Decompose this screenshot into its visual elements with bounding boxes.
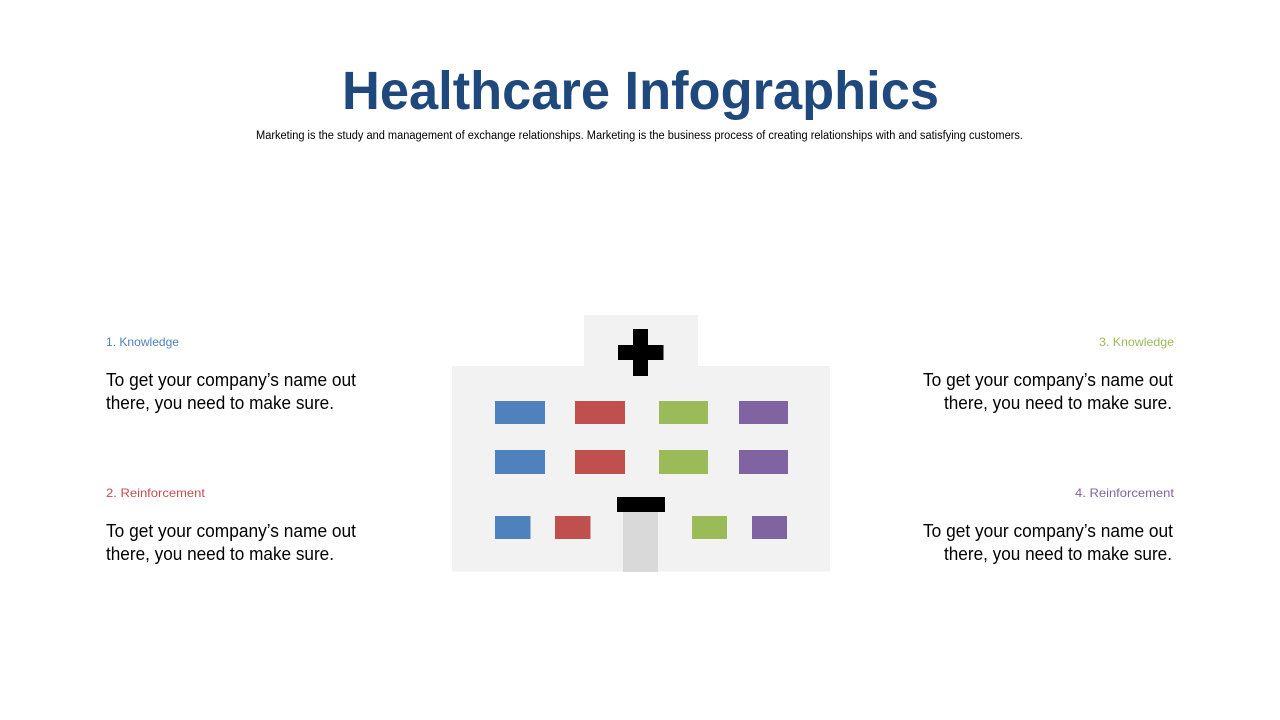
building tower [584,315,698,366]
panel: 2. Reinforcement [106,486,356,564]
icon: medical cross [618,329,664,376]
windows: red [555,401,625,539]
text block 3: To get your company’s name out [923,370,1173,390]
subtitle: Marketing is the study and management of exchange relationships. Marketing is the business process of creating relationships with and satisfying customers. [256,130,1023,142]
windows: purple [739,401,788,539]
text block 2: To get your company’s name out [106,521,356,541]
panel: 1. Knowledge [106,335,356,413]
text block 3: there, you need to make sure. [944,393,1172,413]
label: 4. Reinforcement: 4. Reinforcement [1075,486,1175,500]
text block 2 [106,521,356,564]
building main block [452,366,830,572]
text block 4 [923,521,1173,564]
door [623,512,658,572]
text block 4: there, you need to make sure. [944,544,1172,564]
text block 3 [923,370,1173,413]
text block 1: there, you need to make sure. [106,393,334,413]
text block 4: To get your company’s name out [923,521,1173,541]
label: 1. Knowledge: 1. Knowledge [106,335,179,349]
text block 1 [106,370,356,413]
title: Healthcare Infographics [342,61,939,121]
text block 2: there, you need to make sure. [106,544,334,564]
text block 1: To get your company’s name out [106,370,356,390]
panel: 4. Reinforcement [923,486,1175,564]
panel: 3. Knowledge [923,335,1174,413]
label: 2. Reinforcement: 2. Reinforcement [106,486,206,500]
windows: green [659,401,727,539]
icon: hospital building [452,315,830,572]
door canopy [617,497,665,512]
label: 3. Knowledge: 3. Knowledge [1099,335,1174,349]
windows: blue [495,401,545,539]
